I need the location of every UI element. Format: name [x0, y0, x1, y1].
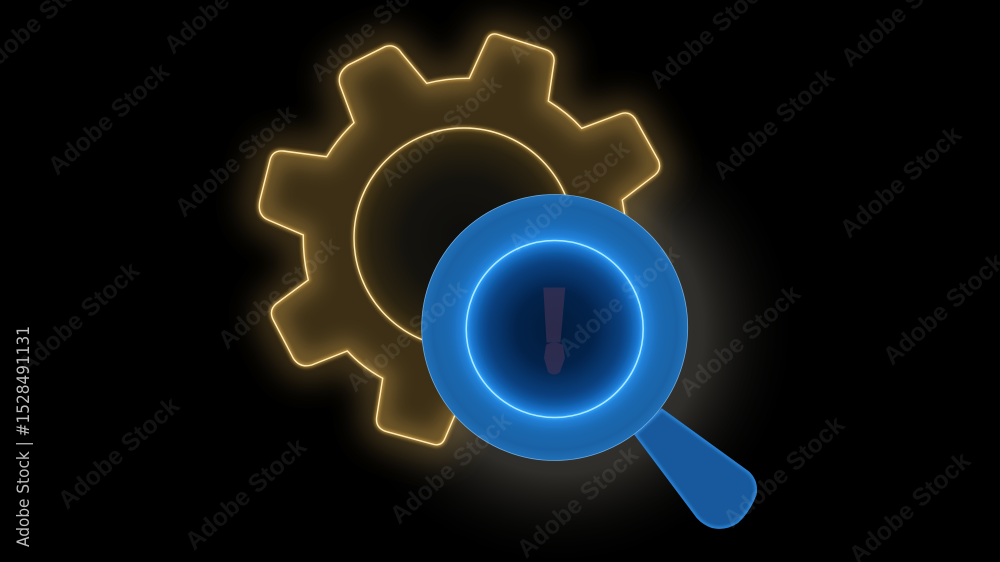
- gear edge inner glow: [259, 34, 660, 445]
- watermarks: Adobe Stock: [835, 120, 967, 244]
- magnifier lens interior: [466, 240, 643, 418]
- watermarks: Adobe Stock: [213, 231, 345, 355]
- watermarks: Adobe Stock: [503, 134, 635, 258]
- neon lens ring: [466, 240, 643, 418]
- stock id label: Adobe Stock | #1528491131: [14, 326, 34, 547]
- watermarks: Adobe Stock: [13, 256, 145, 380]
- watermarks: Adobe Stock: [674, 279, 806, 403]
- watermarks: Adobe Stock: [708, 62, 840, 186]
- icon: magnifying glass: [422, 194, 757, 529]
- watermarks: Adobe Stock: [43, 57, 175, 181]
- gear outline glow: [259, 34, 660, 445]
- gear centre hole: [354, 128, 574, 348]
- magnifier handle: [634, 408, 757, 529]
- watermarks: Adobe Stock: [53, 391, 185, 515]
- magnifier outer disc: [422, 194, 688, 460]
- watermarks: Adobe Stock: [385, 406, 517, 530]
- watermarks: Adobe Stock: [718, 410, 850, 534]
- gear outline core: [259, 34, 660, 445]
- watermarks: Adobe Stock: [375, 69, 507, 193]
- icon: neon gear: [259, 34, 660, 445]
- gear body: [259, 34, 660, 445]
- icon: exclamation mark: [543, 288, 565, 374]
- watermarks: Adobe Stock: [170, 99, 302, 223]
- watermarks: Adobe Stock: [180, 432, 312, 556]
- watermarks: Adobe Stock: [512, 440, 644, 562]
- gear and magnifier outer glow: [259, 34, 800, 562]
- watermarks: Adobe Stock: [553, 239, 685, 363]
- watermarks: Adobe Stock: [341, 274, 473, 398]
